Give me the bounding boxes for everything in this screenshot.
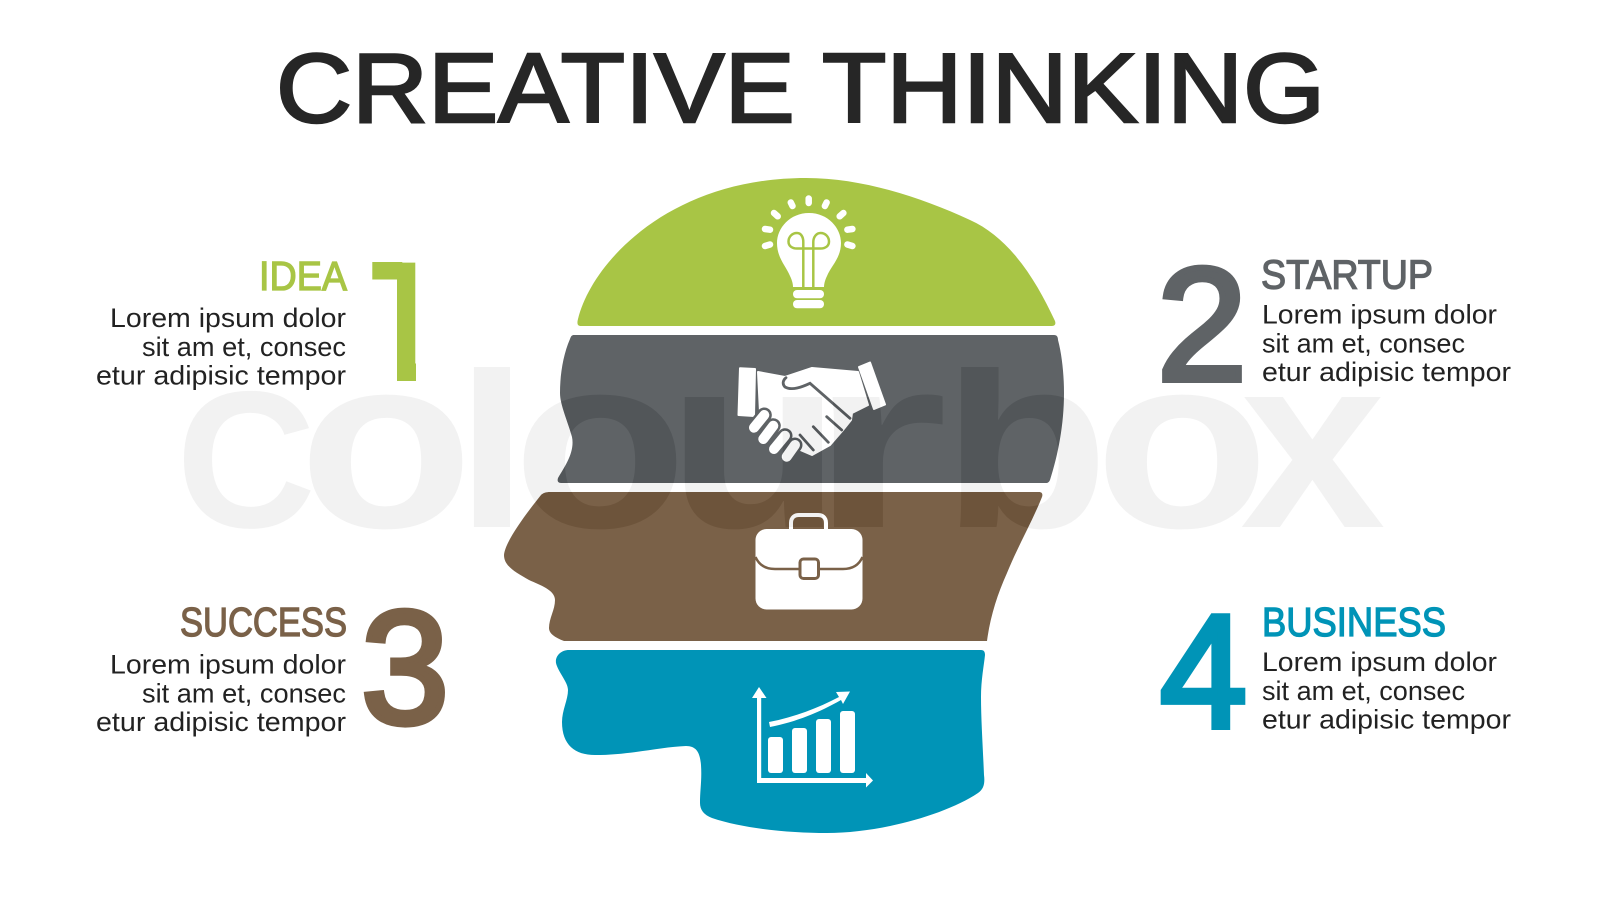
item 4: business <box>1160 582 1511 762</box>
watermark: o <box>298 305 474 580</box>
heading: success: SUCCESS <box>180 599 347 645</box>
body text: etur adipisic tempor <box>96 360 346 390</box>
number 4: 4 <box>1160 582 1247 762</box>
body text <box>1262 647 1511 734</box>
watermark: l <box>456 305 529 580</box>
icon: light bulb <box>765 198 852 308</box>
body text <box>1262 300 1511 387</box>
number 3: 3 <box>361 578 449 758</box>
segment: blue band <box>556 650 985 833</box>
body text: etur adipisic tempor <box>96 707 346 737</box>
number 1: 1 <box>352 226 447 418</box>
icon: growth chart <box>752 687 873 788</box>
body text: etur adipisic tempor <box>1262 357 1511 387</box>
item 2: startup <box>1157 235 1511 415</box>
watermark: o <box>512 305 688 580</box>
head diagram <box>504 178 1064 833</box>
number 2: 2 <box>1157 235 1247 415</box>
watermark: x <box>1240 305 1386 580</box>
watermark: b <box>942 305 1109 580</box>
title: CREATIVE THINKING <box>276 33 1325 143</box>
watermark: o <box>1094 305 1270 580</box>
icon: handshake <box>738 362 885 457</box>
body text <box>96 303 346 390</box>
body text: Lorem ipsum dolor <box>1262 300 1497 330</box>
item 3: success <box>96 578 449 758</box>
item 1: idea <box>97 261 416 390</box>
body text: Lorem ipsum dolor <box>110 650 346 680</box>
body text <box>96 650 346 737</box>
segment: grey band <box>558 335 1064 483</box>
body text: sit am et, consec <box>1262 328 1465 358</box>
heading: idea: IDEA <box>259 253 348 299</box>
heading: business: BUSINESS <box>1262 599 1446 645</box>
infographic canvas <box>97 52 1511 833</box>
watermark: C <box>176 351 316 569</box>
body text: etur adipisic tempor <box>1262 704 1511 734</box>
heading: startup: STARTUP <box>1261 252 1433 298</box>
body text: Lorem ipsum dolor <box>110 303 346 333</box>
watermark <box>184 367 1384 530</box>
body text: sit am et, consec <box>142 332 346 362</box>
body text: Lorem ipsum dolor <box>1262 647 1497 677</box>
segment: green crown <box>577 178 1055 326</box>
watermark: r <box>809 305 948 580</box>
body text: sit am et, consec <box>1262 676 1465 706</box>
number 1 <box>372 262 416 381</box>
icon: briefcase <box>756 515 862 610</box>
watermark: u <box>667 305 842 580</box>
body text: sit am et, consec <box>142 678 346 708</box>
segment: brown band <box>504 492 1042 641</box>
